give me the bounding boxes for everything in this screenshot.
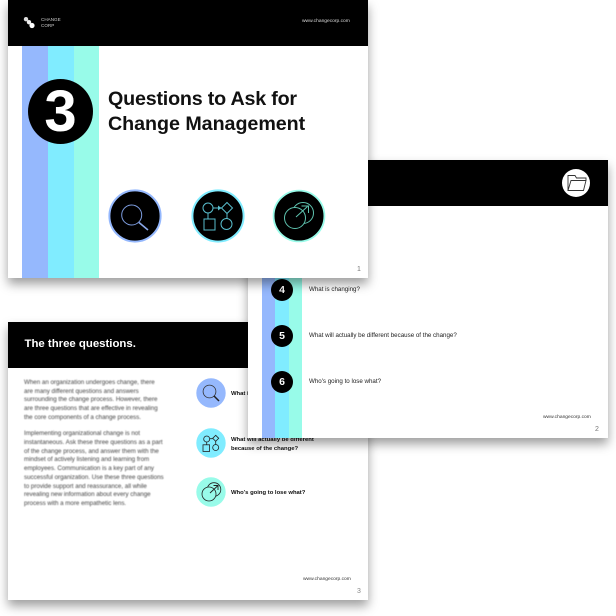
stripe: mint	[74, 46, 99, 278]
panel: slide 2, question list	[248, 160, 608, 438]
body text: to provide support and reassurance, all while	[24, 482, 147, 490]
website footer: www.changecorp.com	[543, 414, 591, 420]
website footer: www.changecorp.com	[303, 576, 351, 582]
body text: employees. Communication is a key part of any	[24, 465, 154, 472]
arrowhead	[218, 206, 222, 210]
page number: 2	[595, 426, 599, 433]
panel: slide 3, the three questions	[8, 322, 368, 600]
header bar with heading	[8, 322, 368, 368]
heading: The three questions.	[24, 338, 136, 350]
title: Change Management	[108, 113, 305, 135]
question 3 text: Who's going to lose what?	[231, 490, 305, 496]
number badge 3: 3	[44, 79, 77, 144]
question 4 text: What is changing?	[309, 286, 360, 293]
icon: magnifier on periwinkle circle	[196, 378, 226, 408]
stripe: cyan	[275, 206, 289, 438]
icon: flowchart on cyan circle	[196, 428, 226, 458]
title	[108, 88, 305, 135]
number badge 4	[271, 279, 293, 301]
brand name: CORP	[41, 22, 54, 28]
number badge 5: 5	[279, 330, 285, 342]
stripe: cyan	[48, 46, 74, 278]
title: Questions to Ask for	[108, 88, 297, 110]
page number: 3	[357, 588, 361, 595]
header bar	[248, 160, 608, 206]
body text: Implementing organizational change is not	[24, 430, 140, 437]
brand name	[41, 16, 61, 28]
number badge 6	[271, 371, 293, 393]
header bar	[8, 0, 368, 46]
page number: 1	[357, 266, 361, 273]
question 6 text: Who's going to lose what?	[309, 378, 381, 384]
body text: are three questions that are effective in revealing	[24, 405, 158, 412]
icon: flowchart	[191, 189, 245, 243]
body text: When an organization undergoes change, there	[24, 379, 155, 386]
stripe: periwinkle	[262, 206, 275, 438]
body text: surrounding the change process. However, there	[24, 396, 157, 403]
body text	[24, 379, 164, 507]
website: www.changecorp.com	[302, 18, 350, 24]
icon: overlapping circles on mint circle	[196, 477, 226, 507]
stripe: mint	[289, 206, 302, 438]
brand name: CHANGE	[41, 16, 61, 22]
icon: overlapping circles	[272, 190, 326, 242]
body text: the core components of a change process.	[24, 414, 141, 421]
question 2 text: because of the change?	[231, 446, 298, 452]
stripe: periwinkle	[22, 46, 48, 278]
question 2 text	[231, 437, 314, 452]
question 5 text: What will actually be different because of the change?	[309, 332, 457, 338]
body text: mindset of actively listening and learning from	[24, 456, 149, 463]
icon: folder in white circle	[562, 169, 590, 197]
panel: slide 1, cover	[8, 0, 368, 278]
question 2 text: What will actually be different	[231, 437, 314, 443]
body text: are many different questions and answers	[24, 388, 139, 395]
body text: instantaneous. Ask these three questions as a part	[24, 439, 163, 446]
body text: of the change process, and answer them with the	[24, 448, 159, 454]
body text: successful organization. Use these three questions	[24, 474, 164, 481]
icon: magnifier	[108, 189, 162, 243]
number badge 3	[28, 79, 93, 144]
question 1 text: What is changing?	[231, 391, 283, 397]
body text: revealing new information about every change	[24, 491, 151, 498]
number badge 6: 6	[279, 376, 285, 388]
number badge 5	[271, 325, 293, 347]
icon: logo	[24, 17, 35, 28]
body text: process with a more empathetic lens.	[24, 500, 126, 507]
number badge 4: 4	[279, 284, 285, 296]
